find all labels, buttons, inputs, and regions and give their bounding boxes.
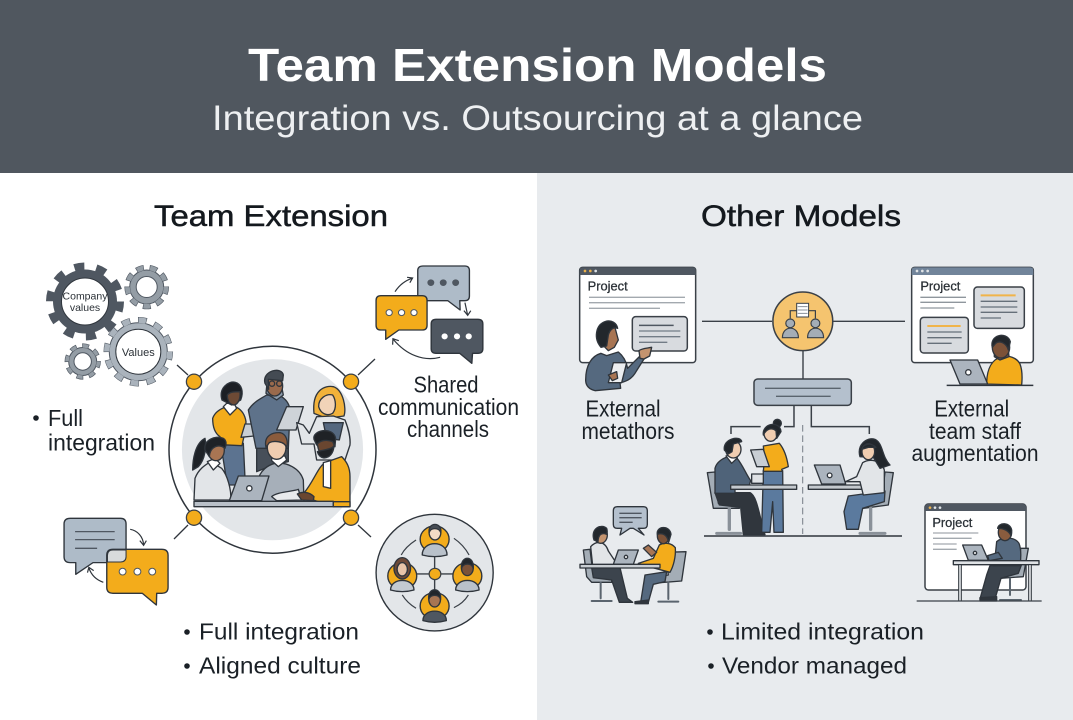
left table — [752, 474, 763, 483]
text: external mentors label — [582, 396, 674, 444]
bubble: gold reply — [107, 549, 168, 605]
desk — [953, 561, 1039, 565]
bubble: dark — [431, 319, 483, 363]
avatar: top — [420, 524, 449, 557]
text: external mentors label: External — [586, 396, 660, 422]
torso — [993, 538, 1021, 566]
connector lines — [702, 321, 905, 379]
avatar: left — [388, 558, 417, 592]
text: shared communication channels: Shared — [414, 372, 478, 398]
text: full integration side note: Full — [48, 405, 83, 431]
text: full integration side note — [33, 405, 155, 456]
text: limited integration and vendor managed — [707, 618, 924, 678]
hub nodes — [186, 374, 359, 525]
panel: right background — [537, 173, 1073, 720]
text: full integration side note: integration — [48, 430, 155, 456]
text: shared communication channels: communication — [378, 394, 519, 420]
heading: Other Models: Other Models — [701, 200, 901, 233]
bubble dots: dark — [442, 333, 472, 339]
window: external mentors: Project — [588, 280, 628, 294]
gear: company values: values — [70, 302, 100, 314]
bubble: gold — [376, 296, 427, 339]
org box — [754, 379, 851, 405]
text: external team staff augmentation label: augmentation — [912, 440, 1038, 466]
window: external mentors — [580, 267, 696, 391]
woman chair — [863, 472, 893, 508]
woman seated — [844, 491, 885, 529]
bearded man — [305, 431, 350, 507]
text: full integration and aligned culture: Aligned culture — [199, 652, 361, 678]
gear: values: Values — [122, 347, 155, 359]
panel: left background — [0, 173, 537, 720]
gear: company values: Company — [63, 290, 108, 302]
gear: small top — [127, 268, 166, 306]
text: external team staff augmentation label: External — [934, 396, 1009, 422]
team illustration — [193, 370, 350, 507]
window: staff augmentation: Project — [920, 280, 961, 294]
avatar: right — [453, 558, 482, 592]
woman standing — [762, 471, 783, 532]
gear: company values — [50, 266, 120, 336]
icon: message exchange bubbles — [64, 518, 168, 605]
right person legs — [641, 572, 667, 602]
text: external team staff augmentation label: team staff — [929, 418, 1021, 444]
header band — [0, 0, 1073, 173]
speech bubble — [613, 507, 647, 535]
bubble: blue message — [64, 518, 126, 574]
text: external mentors label: metathors — [582, 418, 674, 444]
right chair — [652, 552, 686, 583]
icon: hub ring with team — [169, 346, 376, 553]
subtitle: Integration vs. Outsourcing at a glance — [212, 99, 863, 138]
laptop — [613, 550, 638, 564]
text: limited integration and vendor managed: Limited integration — [721, 618, 924, 644]
dashed divider — [801, 425, 804, 534]
icon: central hub — [773, 292, 833, 351]
bubble dots: reply — [119, 568, 156, 575]
seated woman left — [193, 437, 231, 500]
heading: Team Extension: Team Extension — [154, 200, 388, 233]
icon: shared communication bubbles — [376, 266, 483, 363]
man — [715, 493, 765, 535]
text: shared communication channels — [378, 372, 519, 442]
bottom-right desk scene: Project — [932, 516, 973, 530]
arrows between message bubbles — [87, 529, 146, 582]
text: full integration and aligned culture: Full integration — [199, 618, 359, 644]
bubble dots: blue — [427, 279, 459, 286]
left chair — [583, 549, 612, 582]
centre office scene — [704, 379, 902, 536]
right person torso — [638, 543, 675, 572]
right table and laptop — [808, 485, 868, 489]
window: staff augmentation — [912, 267, 1033, 385]
title: Team Extension Models — [248, 39, 827, 91]
bottom-left meeting scene — [580, 507, 686, 604]
arrows between bubbles — [393, 277, 471, 359]
icon: gears — [50, 266, 170, 383]
icon: connected people circle — [376, 514, 493, 631]
left person legs — [592, 568, 633, 602]
text: limited integration and vendor managed: Vendor managed — [722, 652, 907, 678]
bubble dots: gold — [386, 310, 417, 316]
floor line — [704, 534, 902, 538]
org connectors — [731, 405, 869, 434]
left person torso — [591, 542, 615, 566]
man with glasses — [248, 370, 303, 472]
bottom-right desk scene — [917, 504, 1042, 601]
standing woman — [213, 382, 262, 485]
augmented worker figure — [950, 335, 1022, 385]
man chair — [707, 472, 739, 508]
bubble: blue — [418, 266, 469, 310]
table — [580, 564, 660, 568]
text: full integration and aligned culture — [184, 618, 361, 678]
avatar: bottom — [420, 590, 449, 622]
legs — [980, 564, 1022, 599]
blonde woman — [297, 386, 350, 460]
centre seated man — [257, 433, 304, 502]
text: external team staff augmentation label — [912, 396, 1038, 466]
mentor figure — [586, 321, 652, 391]
gear: small bottom — [67, 346, 98, 377]
laptop — [963, 545, 988, 560]
text: shared communication channels: channels — [407, 416, 489, 442]
laptop and table — [194, 476, 350, 507]
chair — [1000, 548, 1028, 578]
